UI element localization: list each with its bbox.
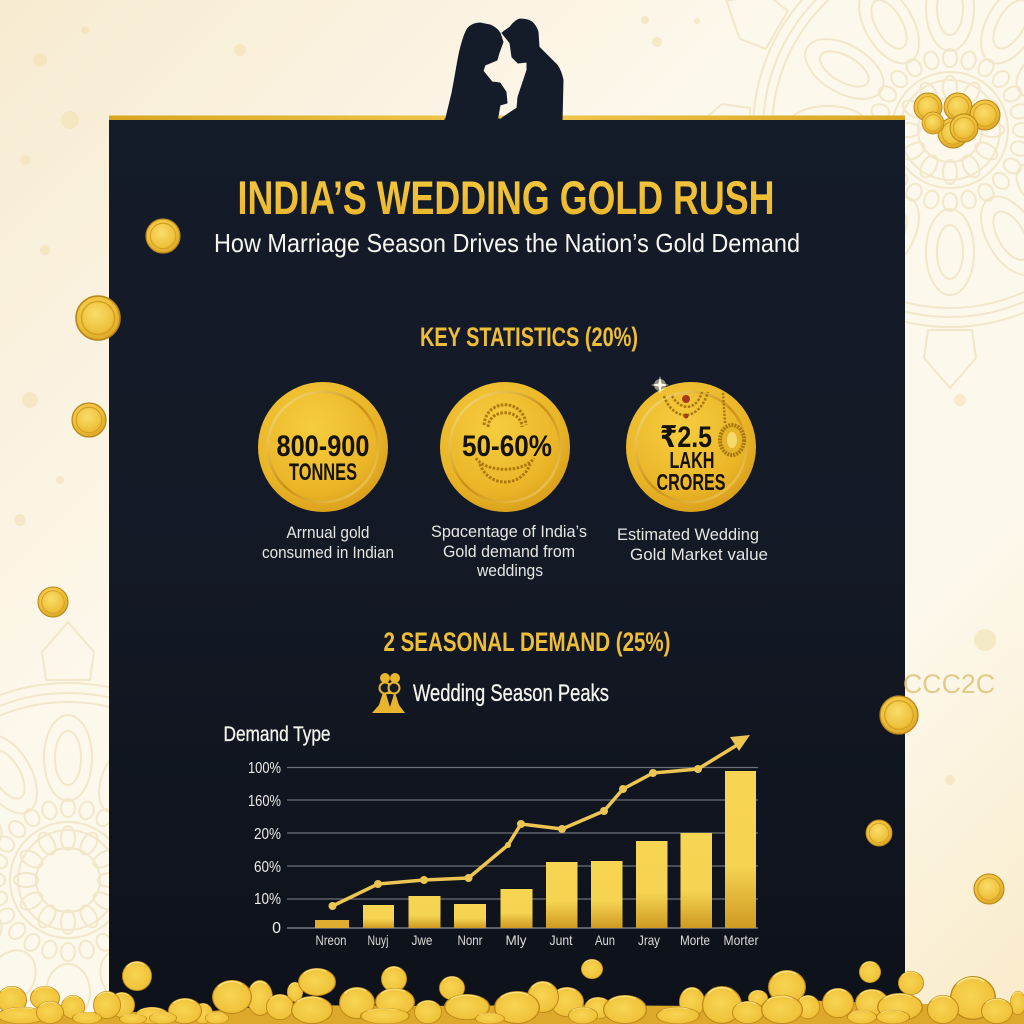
chart y axis labels: 100% bbox=[248, 760, 281, 777]
chart trend markers bbox=[328, 765, 702, 910]
chart x axis labels: Morter bbox=[724, 932, 759, 948]
stat coin: market value: CRORES bbox=[656, 469, 726, 495]
stat coin: percentage bbox=[440, 382, 570, 512]
panel top gold line bbox=[109, 116, 905, 120]
chart y axis labels bbox=[248, 760, 281, 937]
icon: wedding couple bbox=[372, 673, 405, 713]
stat coin: tonnes bbox=[258, 382, 388, 512]
chart y axis labels: 60% bbox=[254, 859, 281, 876]
icon: earring bbox=[723, 393, 725, 423]
loose gold coins bbox=[38, 219, 1004, 904]
chart x axis labels: Mly bbox=[506, 932, 526, 948]
chart bars bbox=[315, 771, 756, 928]
stat coin: market value: ₹2.5 bbox=[660, 421, 712, 454]
caption: market value: Gold Market value bbox=[630, 545, 768, 564]
stat coin: market value bbox=[626, 376, 756, 512]
background mandala: lower left bbox=[0, 622, 326, 1024]
icon: necklace with red gem bbox=[664, 392, 708, 415]
chart trend arrowhead bbox=[730, 735, 750, 751]
chart axis title: Demand Type bbox=[224, 723, 330, 746]
chart y axis labels: 20% bbox=[254, 826, 281, 843]
caption: percentage of demand: Gold demand from bbox=[443, 542, 575, 561]
chart x axis labels: Jray bbox=[638, 932, 660, 948]
chart gridlines bbox=[287, 768, 758, 928]
icon: necklace top bbox=[484, 405, 526, 427]
chart x axis labels: Nonr bbox=[458, 932, 483, 948]
stat coin: percentage: 50-60% bbox=[462, 430, 552, 463]
chart y axis labels: 0 bbox=[272, 920, 281, 937]
icon: necklace bottom bbox=[476, 458, 534, 482]
chart y axis labels: 160% bbox=[248, 793, 281, 810]
chart x axis labels: Jwe bbox=[412, 932, 433, 948]
chart subtitle: Wedding Season Peaks bbox=[413, 680, 609, 707]
caption: annual gold bbox=[262, 523, 394, 562]
subtitle: How Marriage Season Drives the Nation’s Gold Demand bbox=[214, 228, 800, 258]
caption: market value bbox=[617, 525, 768, 564]
stat coin: market value: LAKH bbox=[670, 447, 714, 473]
chart x axis labels: Nuyj bbox=[368, 932, 388, 948]
caption: percentage of demand bbox=[431, 522, 587, 580]
chart trend line bbox=[332, 742, 742, 906]
coin pile: bottom bbox=[0, 959, 1024, 1024]
stat coin: tonnes: 800-900 bbox=[276, 430, 370, 463]
heading: key statistics: KEY STATISTICS (20%) bbox=[420, 322, 638, 352]
background mandala: top right bbox=[692, 0, 1024, 388]
chart y axis labels: 10% bbox=[254, 891, 281, 908]
caption: annual gold: Arrnual gold bbox=[286, 523, 370, 542]
chart: demand by month bbox=[224, 723, 759, 948]
panel: dark main card bbox=[109, 119, 905, 1024]
icon: couple silhouette bbox=[445, 19, 563, 125]
heading: seasonal demand: 2 SEASONAL DEMAND (25%) bbox=[384, 627, 670, 657]
coin cluster: top right bbox=[914, 93, 1000, 148]
icon: sparkle bbox=[651, 376, 669, 394]
stray label: CCC2C bbox=[903, 669, 995, 699]
background bokeh dots bbox=[14, 16, 996, 785]
chart x axis labels: Aun bbox=[595, 932, 615, 948]
caption: percentage of demand: Spɑcentage of India’s bbox=[431, 522, 587, 541]
caption: annual gold: consumed in Indian bbox=[262, 543, 394, 562]
chart x axis labels: Nreon bbox=[316, 932, 346, 948]
stat coin: tonnes: TONNES bbox=[289, 459, 357, 486]
chart x axis labels: Morte bbox=[680, 932, 710, 948]
chart x axis labels bbox=[316, 932, 759, 948]
caption: percentage of demand: weddings bbox=[476, 561, 543, 580]
chart x axis labels: Junt bbox=[550, 932, 573, 948]
title: INDIA’S WEDDING GOLD RUSH bbox=[238, 171, 774, 224]
caption: market value: Estimated Wedding bbox=[617, 525, 759, 544]
